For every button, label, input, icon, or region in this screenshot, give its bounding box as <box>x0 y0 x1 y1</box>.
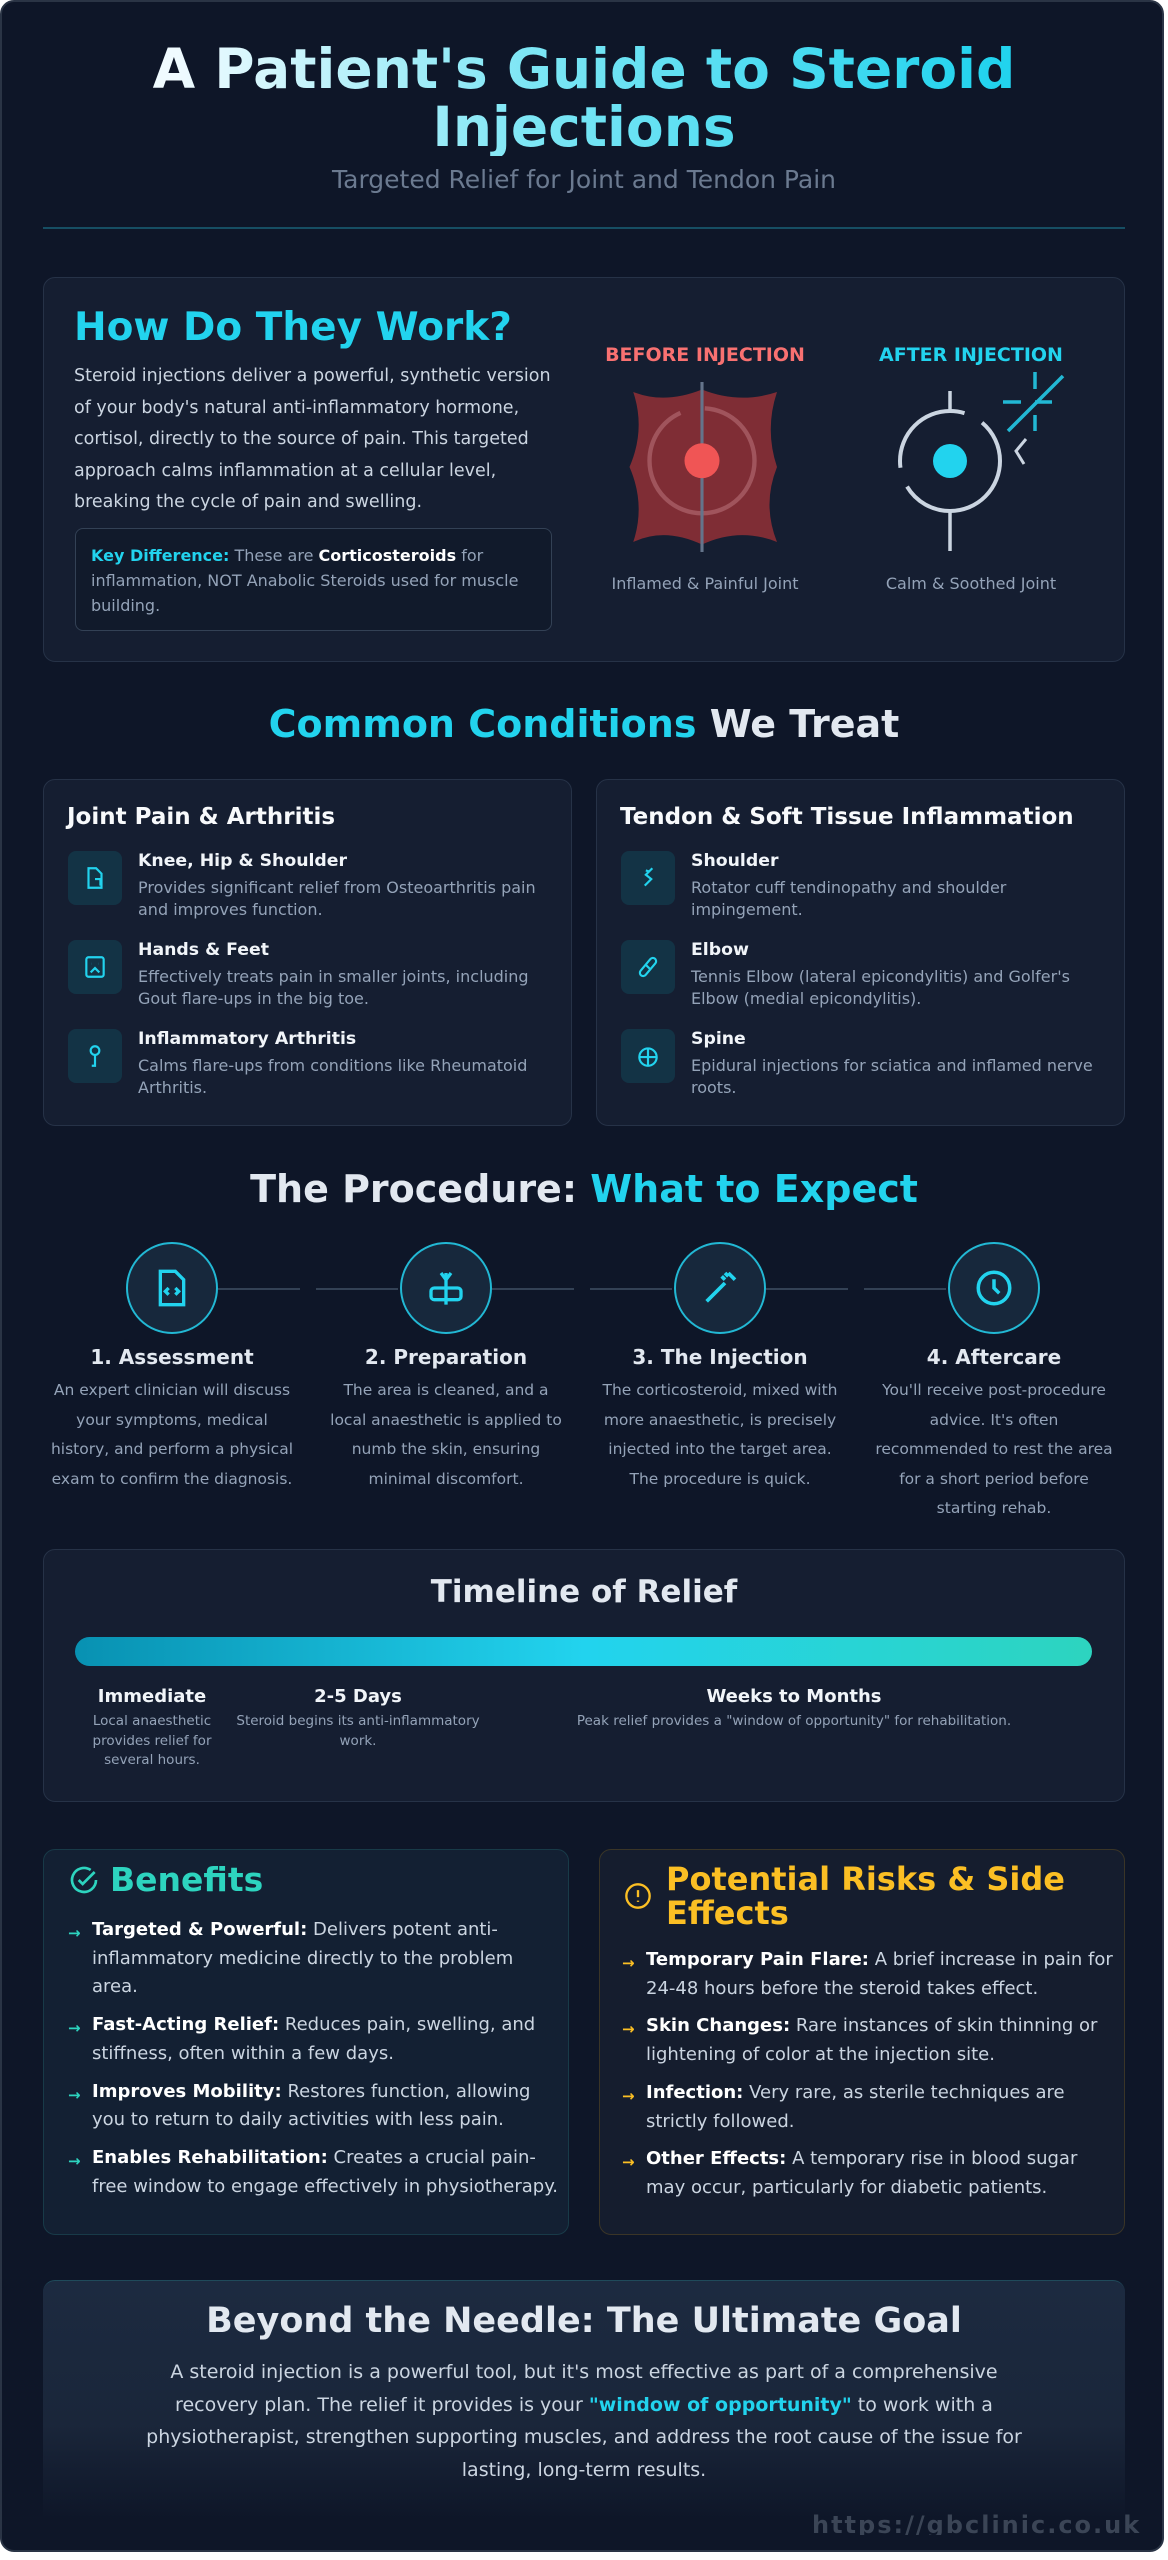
title: A Patient's Guide to Steroid <box>153 37 1015 101</box>
list: benefits: Fast-Acting Relief: Reduces pain, swelling, and stiffness, often within a few days. <box>92 2014 535 2064</box>
title <box>2 40 1166 156</box>
list: risks: Other Effects: A temporary rise in blood sugar may occur, particularly for diabetic patients. <box>646 2148 1077 2198</box>
text: The corticosteroid, mixed with more anaesthetic, is precisely injected into the target area. The procedure is quick. <box>602 1381 838 1488</box>
subtitle: Targeted Relief for Joint and Tendon Pain <box>332 165 836 194</box>
connectors <box>218 1288 300 1290</box>
text: explanation: Steroid injections deliver a powerful, synthetic version of your body's natural anti-inflammatory hormone, cortisol, directly to the source of pain. This targeted approach calms inflammation at a cellular level, breaking the cycle of pain and swelling. <box>74 366 551 512</box>
item: hands <box>68 940 529 1008</box>
caption: calm: Calm & Soothed Joint <box>886 574 1056 593</box>
step: preparation <box>330 1242 562 1488</box>
text: You'll receive post-procedure advice. It's often recommended to rest the area for a short period before starting rehab. <box>875 1381 1113 1517</box>
label: weeks to months: Peak relief provides a "window of opportunity" for rehabilitation. <box>577 1713 1011 1729</box>
heading: how do they work: How Do They Work? <box>74 305 512 350</box>
title: Injections <box>432 95 736 159</box>
text: 1. Assessment <box>90 1345 254 1369</box>
heading: procedure: The Procedure: What to Expect <box>250 1167 918 1211</box>
panel: beyond the needle <box>43 2280 1125 2520</box>
item: shoulder <box>621 851 1006 918</box>
label: weeks to months: Weeks to Months <box>706 1686 882 1707</box>
panel: tendon: Rotator cuff tendinopathy and shoulder impingement. <box>691 878 1006 918</box>
icon: calm joint <box>898 372 1064 551</box>
icon: inflamed joint <box>630 382 777 552</box>
panel: tendon: Epidural injections for sciatica and inflamed nerve roots. <box>691 1056 1093 1096</box>
caption: inflamed: Inflamed & Painful Joint <box>612 574 798 593</box>
text: An expert clinician will discuss your symptoms, medical history, and perform a physical exam to confirm the diagnosis. <box>51 1381 293 1488</box>
heading: tendon: Tendon & Soft Tissue Inflammation <box>620 804 1074 830</box>
step: assessment <box>51 1242 293 1488</box>
heading: risks: Potential Risks & Side Effects <box>666 1860 1065 1932</box>
panel: how do they work <box>43 277 1125 662</box>
panel: timeline <box>43 1549 1125 1802</box>
label: weeks to months <box>577 1686 1011 1729</box>
label: after: AFTER INJECTION <box>879 344 1063 366</box>
step: aftercare <box>875 1242 1113 1517</box>
panel: joint pain <box>43 779 572 1126</box>
panel: risks <box>599 1849 1125 2235</box>
list: risks: Temporary Pain Flare: A brief increase in pain for 24-48 hours before the steroid takes effect. <box>646 1949 1113 1999</box>
callout: key difference: Key Difference: These are Corticosteroids for inflammation, NOT Anabolic Steroids used for muscle building. <box>91 546 518 615</box>
panel: joint pain: Hands & Feet <box>138 940 269 960</box>
text: goal paragraph: A steroid injection is a powerful tool, but it's most effective as part of a comprehensive recovery plan. The relief it provides is your "window of opportunity" to work with a physiotherapist, strengthen supporting muscles, and address the root cause of the issue for lasting, long-term results. <box>146 2361 1022 2480</box>
item: elbow <box>621 940 1070 1008</box>
list: risks: Skin Changes: Rare instances of skin thinning or lightening of color at the injection site. <box>646 2015 1097 2065</box>
label: 2-5 days: 2-5 Days <box>314 1686 402 1707</box>
item: inflammatory <box>68 1029 527 1096</box>
step: injection <box>602 1242 838 1488</box>
callout: key difference <box>75 528 552 631</box>
text: 3. The Injection <box>632 1345 808 1369</box>
panel: joint pain: Effectively treats pain in smaller joints, including Gout flare-ups in the big toe. <box>138 967 529 1008</box>
list: risks: Infection: Very rare, as sterile techniques are strictly followed. <box>646 2082 1065 2132</box>
label: before: BEFORE INJECTION <box>605 344 805 366</box>
heading: ultimate goal: Beyond the Needle: The Ultimate Goal <box>206 2301 962 2341</box>
panel: joint pain: Calms flare-ups from conditions like Rheumatoid Arthritis. <box>138 1056 527 1096</box>
list: benefits: Enables Rehabilitation: Creates a crucial pain-free window to engage effectively in physiotherapy. <box>92 2147 558 2197</box>
list: risks <box>622 1949 1113 2198</box>
label: 2-5 days: Steroid begins its anti-inflammatory work. <box>236 1713 480 1748</box>
label: immediate: Local anaesthetic provides relief for several hours. <box>92 1713 212 1768</box>
panel: tendon: Shoulder <box>691 851 778 871</box>
label: immediate <box>92 1686 212 1768</box>
item: spine <box>621 1029 1093 1096</box>
text: 4. Aftercare <box>927 1345 1061 1369</box>
panel: tendon <box>596 779 1125 1126</box>
list: benefits: Targeted & Powerful: Delivers potent anti-inflammatory medicine directly to the problem area. <box>92 1919 513 1997</box>
list: benefits: Improves Mobility: Restores function, allowing you to return to daily activities with less pain. <box>92 2081 530 2130</box>
heading: timeline: Timeline of Relief <box>431 1574 737 1610</box>
label: immediate: Immediate <box>98 1686 206 1707</box>
list: benefits <box>68 1919 558 2197</box>
panel: joint pain: Knee, Hip & Shoulder <box>138 851 347 871</box>
text: The area is cleaned, and a local anaesthetic is applied to numb the skin, ensuring minimal discomfort. <box>330 1381 562 1488</box>
panel: joint pain: Provides significant relief from Osteoarthritis pain and improves function. <box>138 878 536 918</box>
label: 2-5 days <box>236 1686 480 1748</box>
panel: joint pain: Inflammatory Arthritis <box>138 1029 356 1049</box>
text: 2. Preparation <box>365 1345 527 1369</box>
heading: benefits: Benefits <box>110 1860 263 1899</box>
panel: tendon: Spine <box>691 1029 746 1049</box>
panel: benefits <box>43 1849 569 2235</box>
item: knee <box>68 851 536 918</box>
panel: tendon: Elbow <box>691 940 749 960</box>
panel: tendon: Tennis Elbow (lateral epicondylitis) and Golfer's Elbow (medial epicondylitis). <box>691 967 1070 1008</box>
heading: common conditions: Common Conditions We Treat <box>269 702 899 746</box>
heading: joint pain: Joint Pain & Arthritis <box>67 804 335 830</box>
bar: timeline gradient <box>75 1637 1092 1666</box>
